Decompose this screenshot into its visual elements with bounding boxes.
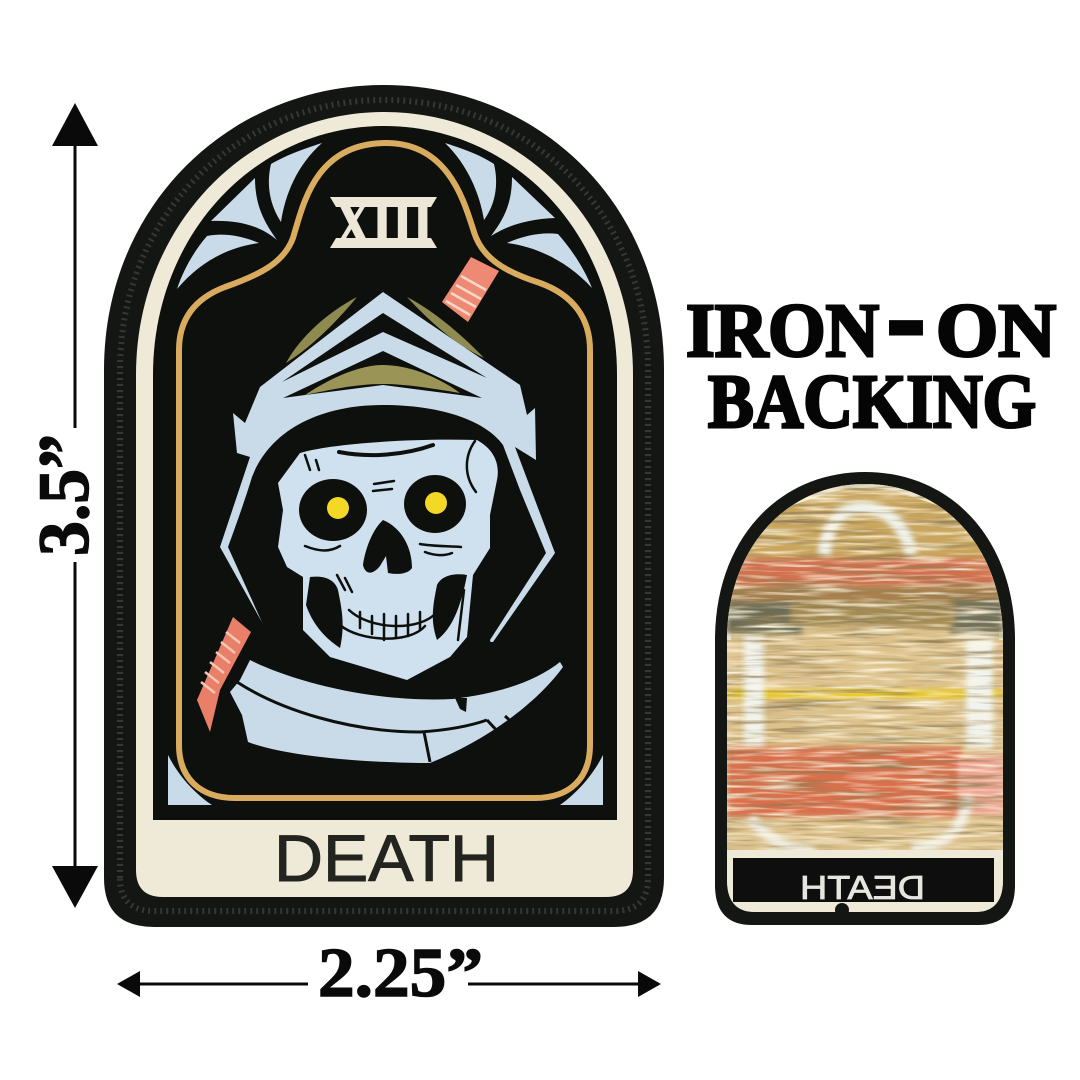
corner ornaments: top fans xyxy=(177,143,592,289)
death label: DEATH xyxy=(274,821,499,895)
arrowhead left xyxy=(117,971,140,997)
golden upper field xyxy=(733,492,998,560)
main patch: Death tarot card xyxy=(104,85,664,927)
black reversed label xyxy=(733,858,994,902)
small patch: reverse side xyxy=(715,472,1015,925)
skull xyxy=(278,440,498,680)
reverse border xyxy=(715,472,1015,925)
hood folds xyxy=(282,313,487,398)
numeral XIII: XIII xyxy=(334,185,433,261)
reaper hood xyxy=(220,292,555,642)
reverse thread field xyxy=(727,484,1003,916)
olive hood highlights xyxy=(286,297,484,363)
gold frame line xyxy=(179,143,590,798)
black card interior xyxy=(153,126,617,820)
stitch knot xyxy=(835,903,849,917)
cream card field xyxy=(136,112,633,897)
scythe handle: upper xyxy=(442,257,499,322)
width arrow: 2.25 inches xyxy=(117,935,661,1012)
thread texture xyxy=(727,484,1003,854)
colored thread bands xyxy=(733,558,995,588)
corner ornaments: bottom xyxy=(168,755,603,805)
arrowhead top xyxy=(52,103,98,146)
arrow line xyxy=(74,140,76,872)
arrow line xyxy=(135,982,645,986)
olive inner fold xyxy=(305,365,460,395)
hood inner shadow xyxy=(228,405,546,660)
heading: iron-on backing: IRON xyxy=(686,289,879,373)
height value: 3.5” xyxy=(24,434,104,556)
cream top edge xyxy=(727,484,1003,640)
skull line details xyxy=(305,441,476,640)
left eye xyxy=(327,497,349,519)
arrowhead right xyxy=(638,971,661,997)
left eye socket xyxy=(299,479,367,541)
heading: iron-on backing: BACKING xyxy=(708,360,1036,444)
arrowhead bottom xyxy=(52,866,98,908)
mirrored DEATH: DEATH xyxy=(800,869,925,906)
heading: iron-on backing: ON xyxy=(936,289,1056,373)
nose cavity xyxy=(363,520,412,574)
cream label band xyxy=(727,850,1003,916)
cheek hollows xyxy=(306,577,343,648)
skull silhouette xyxy=(278,440,498,680)
width value: 2.25” xyxy=(318,935,483,1012)
height arrow: 3.5 inches xyxy=(24,103,104,908)
heading: iron-on backing xyxy=(686,256,1056,444)
infographic canvas xyxy=(39,85,1057,998)
white ghost outline of frame xyxy=(824,508,912,555)
right eye socket xyxy=(404,475,466,533)
scythe blade xyxy=(230,660,563,763)
right eye xyxy=(425,492,447,514)
scythe handle: lower xyxy=(197,617,251,732)
heading: iron-on backing: - xyxy=(888,256,924,378)
patch border xyxy=(104,85,664,927)
